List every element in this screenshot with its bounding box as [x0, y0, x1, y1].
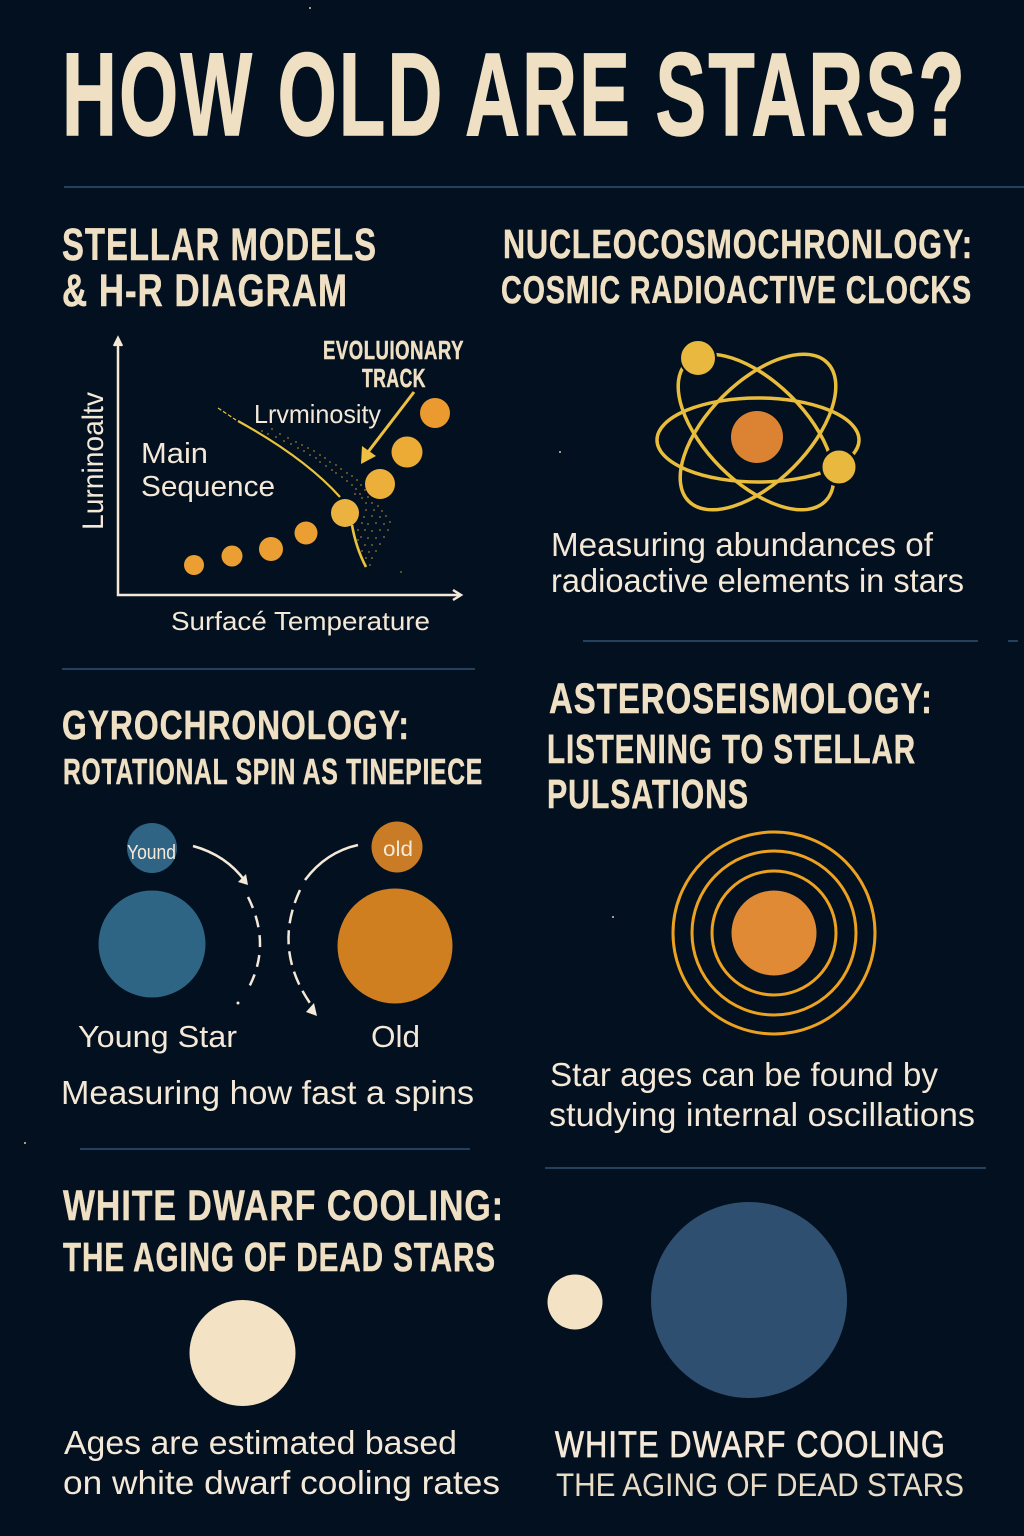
label: luminosity: Lrvminosity — [254, 399, 381, 429]
main sequence stars — [184, 398, 450, 575]
labels: young star and old — [78, 1019, 420, 1054]
text: white dwarf description — [63, 1424, 500, 1501]
text: white dwarf description: on white dwarf cooling rates — [63, 1464, 500, 1501]
main sequence curve — [218, 408, 366, 567]
heading: nucleocosmochronology — [501, 221, 973, 312]
labels: young star and old: Old — [371, 1019, 420, 1054]
panel: white dwarf cooling right — [548, 1202, 964, 1503]
label: main sequence — [141, 438, 275, 503]
heading: white dwarf cooling — [63, 1182, 504, 1280]
icon: young star badge: Yound — [127, 842, 176, 864]
heading: stellar models: STELLAR MODELS — [62, 219, 377, 270]
panel: nucleocosmochronology — [501, 221, 973, 599]
label: evolutionary track: EVOLUIONARY — [323, 335, 464, 365]
heading: gyrochronology — [62, 702, 483, 792]
icon: young star — [98, 890, 206, 998]
arrow: young star rotation — [193, 846, 260, 1004]
text: gyrochronology description: Measuring how fast a spins — [61, 1074, 474, 1111]
text: asteroseismology description: studying internal oscillations — [549, 1096, 975, 1133]
heading: stellar models — [62, 219, 377, 316]
arrow: evolutionary track — [361, 392, 414, 464]
icon: large blue star — [651, 1202, 847, 1398]
panel: stellar models and H-R diagram — [62, 219, 464, 636]
heading: stellar models: & H-R DIAGRAM — [62, 265, 348, 316]
icon: old star badge: old — [383, 838, 413, 861]
arrow: old star rotation — [288, 845, 358, 1016]
panel: gyrochronology — [61, 702, 483, 1111]
label: evolutionary track — [323, 335, 464, 393]
text: asteroseismology description: Star ages can be found by — [550, 1056, 938, 1093]
label: main sequence: Sequence — [141, 471, 275, 503]
text: nucleocosmochronology description: radioactive elements in stars — [551, 562, 964, 599]
text: asteroseismology description — [549, 1056, 975, 1133]
label: main sequence: Main — [141, 438, 208, 470]
caption: white dwarf cooling — [555, 1424, 964, 1503]
axis label: luminosity: Lurninoaltv — [77, 392, 110, 530]
text: white dwarf description: Ages are estimated based — [64, 1424, 457, 1461]
icon: young star badge — [127, 823, 177, 873]
panel: asteroseismology — [547, 675, 975, 1133]
icon: small white dwarf — [548, 1274, 602, 1330]
heading: asteroseismology — [547, 675, 933, 817]
icon: old star — [338, 888, 452, 1004]
icon: pulsating star — [673, 832, 875, 1034]
text: nucleocosmochronology description: Measuring abundances of — [551, 526, 934, 563]
panel: white dwarf cooling left — [63, 1182, 504, 1501]
heading: gyrochronology: GYROCHRONOLOGY: — [62, 702, 410, 748]
text: nucleocosmochronology description — [551, 526, 964, 599]
scatter dust — [262, 429, 401, 572]
icon: old star badge — [372, 822, 422, 872]
chart axes — [114, 338, 461, 600]
caption: white dwarf cooling: THE AGING OF DEAD STARS — [556, 1467, 964, 1503]
heading: gyrochronology: ROTATIONAL SPIN AS TINEPIECE — [63, 751, 483, 792]
label: evolutionary track: TRACK — [362, 363, 426, 393]
heading: white dwarf cooling: THE AGING OF DEAD STARS — [63, 1234, 496, 1280]
axis label: surface temperature: Surfacé Temperature — [171, 606, 430, 636]
heading: white dwarf cooling: WHITE DWARF COOLING: — [63, 1182, 504, 1230]
caption: white dwarf cooling: WHITE DWARF COOLING — [555, 1424, 946, 1465]
H-R diagram chart — [77, 335, 464, 636]
heading: asteroseismology: PULSATIONS — [547, 771, 749, 817]
icon: atom — [651, 327, 863, 537]
labels: young star and old: Young Star — [78, 1019, 237, 1054]
icon: white dwarf — [190, 1300, 296, 1406]
